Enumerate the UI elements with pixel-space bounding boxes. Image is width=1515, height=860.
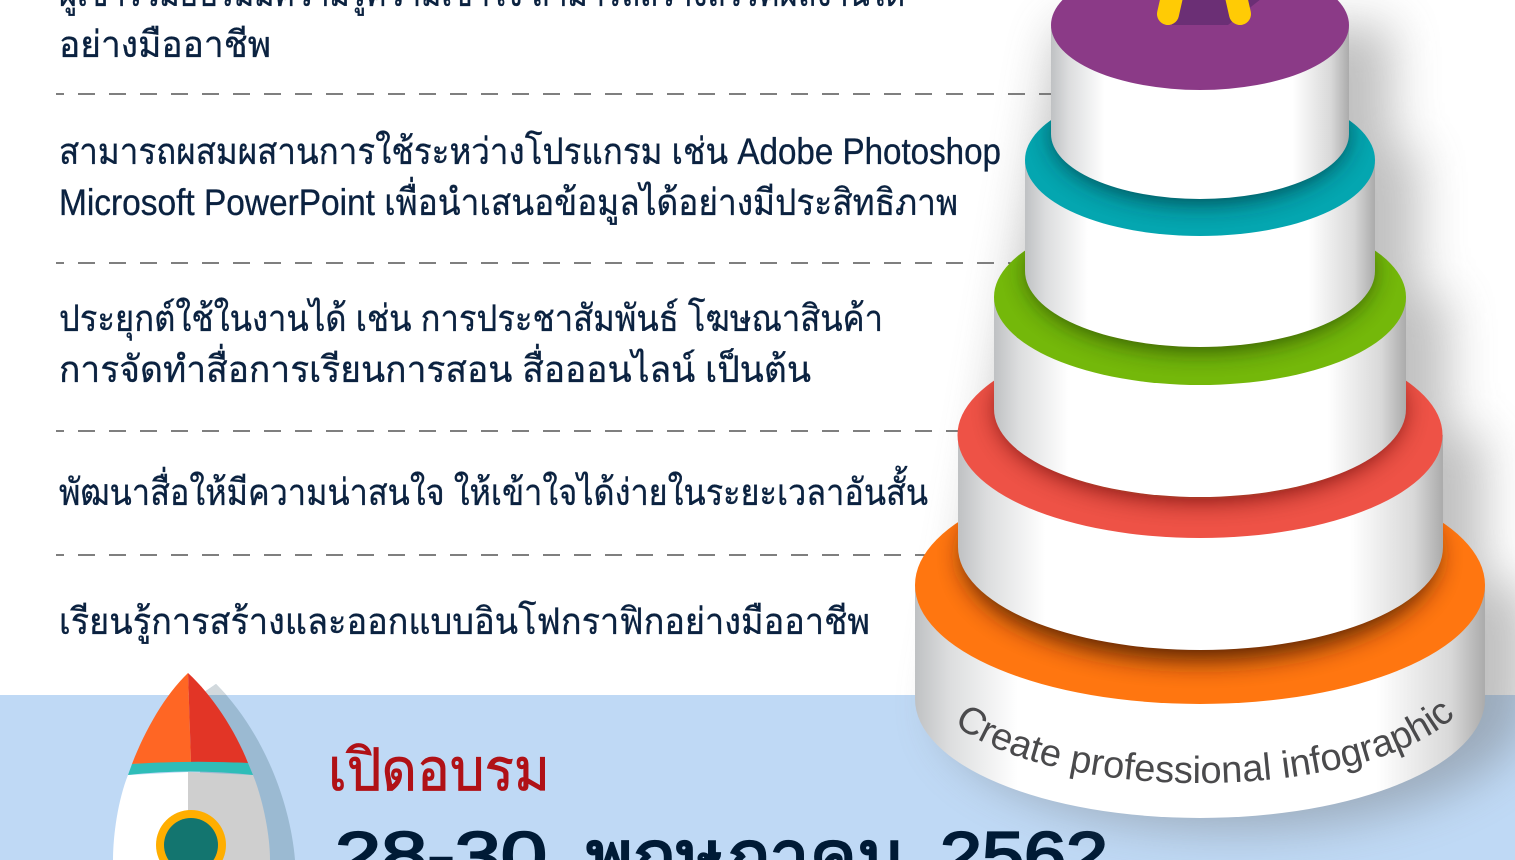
text: benefit 4: พัฒนาสื่อให้มีความน่าสนใจ ให้เข้าใจได้ง่ายในระยะเวลาอันสั้น <box>59 465 928 513</box>
text: benefit 2: Microsoft PowerPoint เพื่อนำเสนอข้อมูลได้อย่างมีประสิทธิภาพ <box>59 176 958 225</box>
blue footer band <box>0 695 1515 860</box>
icon: figure legs on top tier <box>1168 0 1266 25</box>
tier: green <box>994 250 1406 497</box>
text: benefit 3 <box>59 297 883 390</box>
tier: teal <box>1025 120 1375 347</box>
text: benefit 1 <box>59 0 905 65</box>
body text block <box>56 0 1052 644</box>
tier: orange <box>915 522 1485 818</box>
text: benefit 1: อย่างมืออาชีพ <box>59 24 271 65</box>
text: benefit 3: ประยุกต์ใช้ในงานได้ เช่น การประชาสัมพันธ์ โฆษณาสินค้า <box>59 297 883 341</box>
cake tier stack <box>915 0 1515 854</box>
text: benefit 3: การจัดทำสื่อการเรียนการสอน สื่อออนไลน์ เป็นต้น <box>59 343 811 390</box>
text: curved slogan: Create professional infographic <box>959 704 1452 784</box>
heading: training opens: เปิดอบรม <box>328 738 550 803</box>
icon: rocket <box>113 673 295 860</box>
tier: red <box>958 380 1443 650</box>
text: benefit 2 <box>59 130 1001 225</box>
cake outer shadow <box>942 25 1515 828</box>
text: benefit 2: สามารถผสมผสานการใช้ระหว่างโปรแกรม เช่น Adobe Photoshop <box>59 130 1001 172</box>
text: benefit 5: เรียนรู้การสร้างและออกแบบอินโฟกราฟิกอย่างมืออาชีพ <box>59 600 870 644</box>
heading: training date <box>335 818 1108 860</box>
tier: purple <box>1051 0 1349 199</box>
